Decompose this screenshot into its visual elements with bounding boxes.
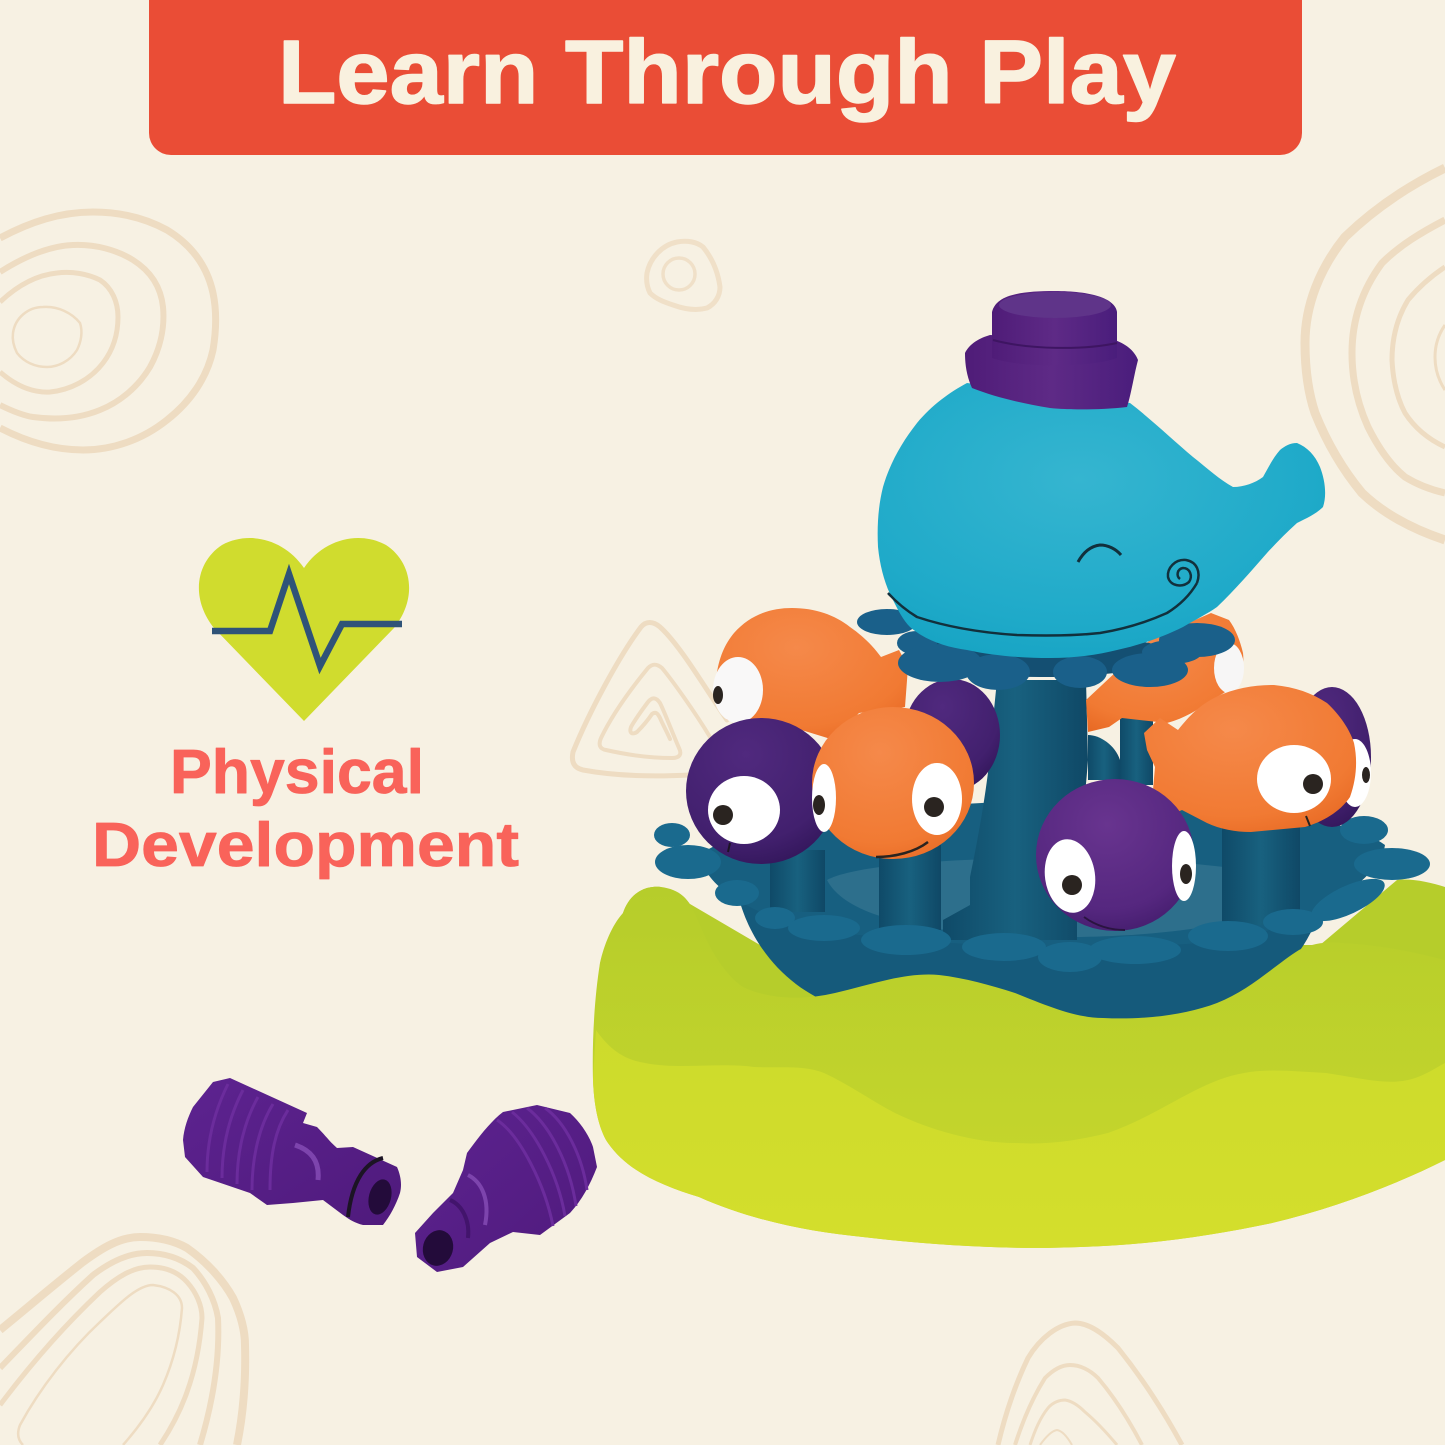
toy: orange fish centre [812,707,974,859]
decorative contour: bottom centre [998,1323,1182,1445]
decorative contour: triangle spiral [572,622,727,776]
toy: connector left [183,1078,401,1225]
toy: orange fish top left [713,608,908,740]
toy: back orange fish right [1086,613,1244,732]
toy: purple fish left [686,718,836,864]
title: Learn Through Play [278,23,1176,123]
decorative contour: right rings [1305,168,1445,540]
title banner [149,0,1302,155]
toy: orange fish right [1144,685,1356,832]
toy: scalloped rim [654,816,1430,972]
toy: back purple fish [904,679,1371,827]
decorative contour: left rings [0,212,216,450]
toy: green base back rim [593,879,1445,1100]
heading: physical development: Development [92,811,519,880]
toy: connector right [415,1105,597,1272]
decorative contour: small top ring [647,241,720,309]
toy: blue tray [700,801,1385,1030]
toy: purple fish front [1036,779,1196,931]
toy: whale hat [965,291,1138,409]
toy: whale body [878,383,1325,658]
heading: physical development: Physical [170,738,424,807]
decorative contour: bottom left [0,1237,245,1445]
toy: whale collar [857,609,1235,690]
toy: fish stems [770,715,1300,930]
toy: green base front [593,887,1445,1248]
heading: physical development [92,738,519,880]
toy: centre column [943,680,1088,940]
icon: heart with pulse [199,538,409,721]
